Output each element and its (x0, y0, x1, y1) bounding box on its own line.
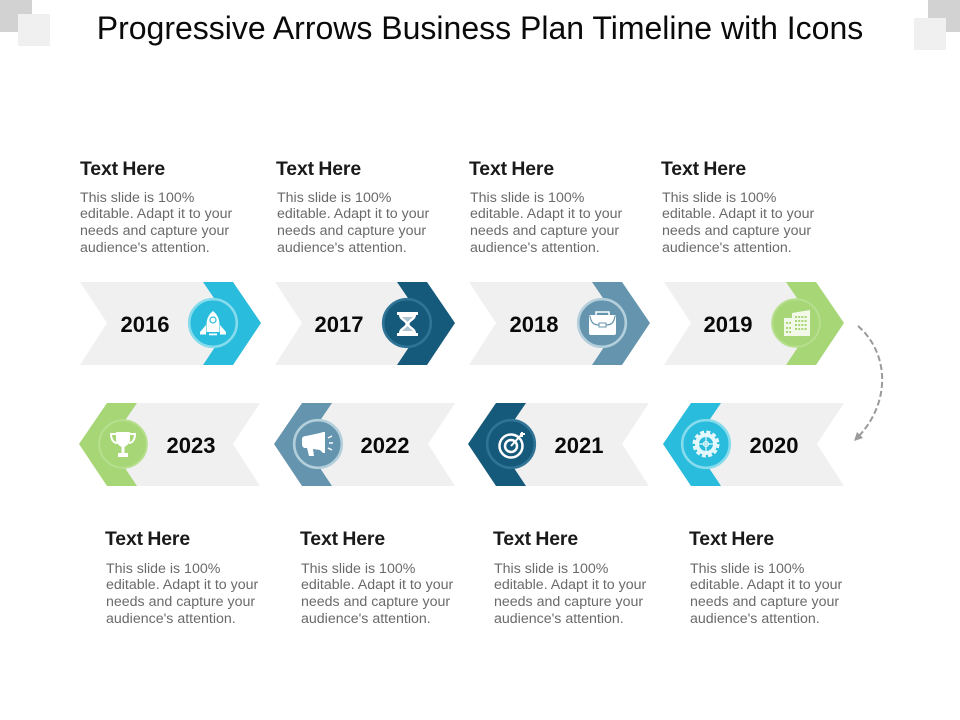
text block: 2016: needs and capture your (80, 223, 229, 239)
text block: 2016 (80, 158, 232, 256)
text block: 2022: audience's attention. (301, 611, 431, 627)
text block: 2017: editable. Adapt it to your (277, 206, 429, 222)
text block: 2021: Text Here (493, 528, 578, 550)
text block: 2022 (300, 528, 453, 627)
text block: 2020: This slide is 100% (690, 561, 805, 577)
text block: 2021 (493, 528, 646, 627)
arrow step: 2018: 2018 (510, 312, 558, 337)
dashed connector arrow (854, 326, 882, 441)
text block: 2021: This slide is 100% (494, 561, 609, 577)
text block: 2016: editable. Adapt it to your (80, 206, 232, 222)
text block: 2019: This slide is 100% (662, 190, 777, 206)
text block: 2016: Text Here (80, 158, 165, 180)
icon: hourglass (397, 312, 418, 336)
text block: 2016: audience's attention. (80, 240, 210, 256)
text block: 2020: audience's attention. (690, 611, 820, 627)
text block: 2019: Text Here (661, 158, 746, 180)
text block: 2017: audience's attention. (277, 240, 407, 256)
arrow step: 2017 (275, 282, 455, 365)
text block: 2022: needs and capture your (301, 594, 450, 610)
icon: trophy (111, 432, 135, 457)
decorative corner squares: right (914, 0, 960, 50)
text block: 2023: This slide is 100% (106, 561, 221, 577)
text block: 2017 (276, 158, 429, 256)
icon: office building (784, 310, 810, 336)
arrow step: 2023: 2023 (167, 433, 215, 458)
text block: 2016: This slide is 100% (80, 190, 195, 206)
text block: 2018: This slide is 100% (470, 190, 585, 206)
text block: 2023: audience's attention. (106, 611, 236, 627)
text block: 2021: audience's attention. (494, 611, 624, 627)
arrow step: 2020 (663, 403, 844, 486)
text block: 2020: Text Here (689, 528, 774, 550)
text block: 2018: needs and capture your (470, 223, 619, 239)
text block: 2022: editable. Adapt it to your (301, 577, 453, 593)
text block: 2023 (105, 528, 258, 627)
text block: 2020: needs and capture your (690, 594, 839, 610)
text block: 2019: audience's attention. (662, 240, 792, 256)
arrow step: 2022 (274, 403, 455, 486)
arrow step: 2019 (664, 282, 844, 365)
text block: 2021: editable. Adapt it to your (494, 577, 646, 593)
arrow step: 2020: 2020 (750, 433, 798, 458)
text block: 2023: needs and capture your (106, 594, 255, 610)
arrow step: 2018 (469, 282, 650, 365)
text block: 2023: Text Here (105, 528, 190, 550)
text block: 2017: This slide is 100% (277, 190, 392, 206)
text block: 2022: This slide is 100% (301, 561, 416, 577)
icon: gear (694, 432, 718, 456)
text block: 2018: audience's attention. (470, 240, 600, 256)
title: Progressive Arrows Business Plan Timeline with Icons (97, 10, 863, 46)
arrow step: 2023 (79, 403, 260, 486)
arrow step: 2021 (468, 403, 649, 486)
text block: 2019: needs and capture your (662, 223, 811, 239)
text block: 2019: editable. Adapt it to your (662, 206, 814, 222)
arrow step: 2016 (80, 282, 261, 365)
arrow step: 2021: 2021 (555, 433, 603, 458)
arrow step: 2017: 2017 (315, 312, 363, 337)
text block: 2017: needs and capture your (277, 223, 426, 239)
arrow step: 2022: 2022 (361, 433, 409, 458)
text block: 2017: Text Here (276, 158, 361, 180)
icon: target (500, 432, 525, 458)
arrow step: 2016: 2016 (121, 312, 169, 337)
arrow step: 2019: 2019 (704, 312, 752, 337)
decorative corner squares: left (0, 0, 50, 46)
text block: 2023: editable. Adapt it to your (106, 577, 258, 593)
text block: 2020: editable. Adapt it to your (690, 577, 842, 593)
text block: 2019 (661, 158, 814, 256)
icon: rocket (200, 311, 226, 335)
text block: 2018: editable. Adapt it to your (470, 206, 622, 222)
text block: 2022: Text Here (300, 528, 385, 550)
text block: 2018 (469, 158, 622, 256)
text block: 2021: needs and capture your (494, 594, 643, 610)
text block: 2018: Text Here (469, 158, 554, 180)
icon: megaphone (302, 432, 333, 456)
text block: 2020 (689, 528, 842, 627)
icon: briefcase (589, 312, 616, 335)
